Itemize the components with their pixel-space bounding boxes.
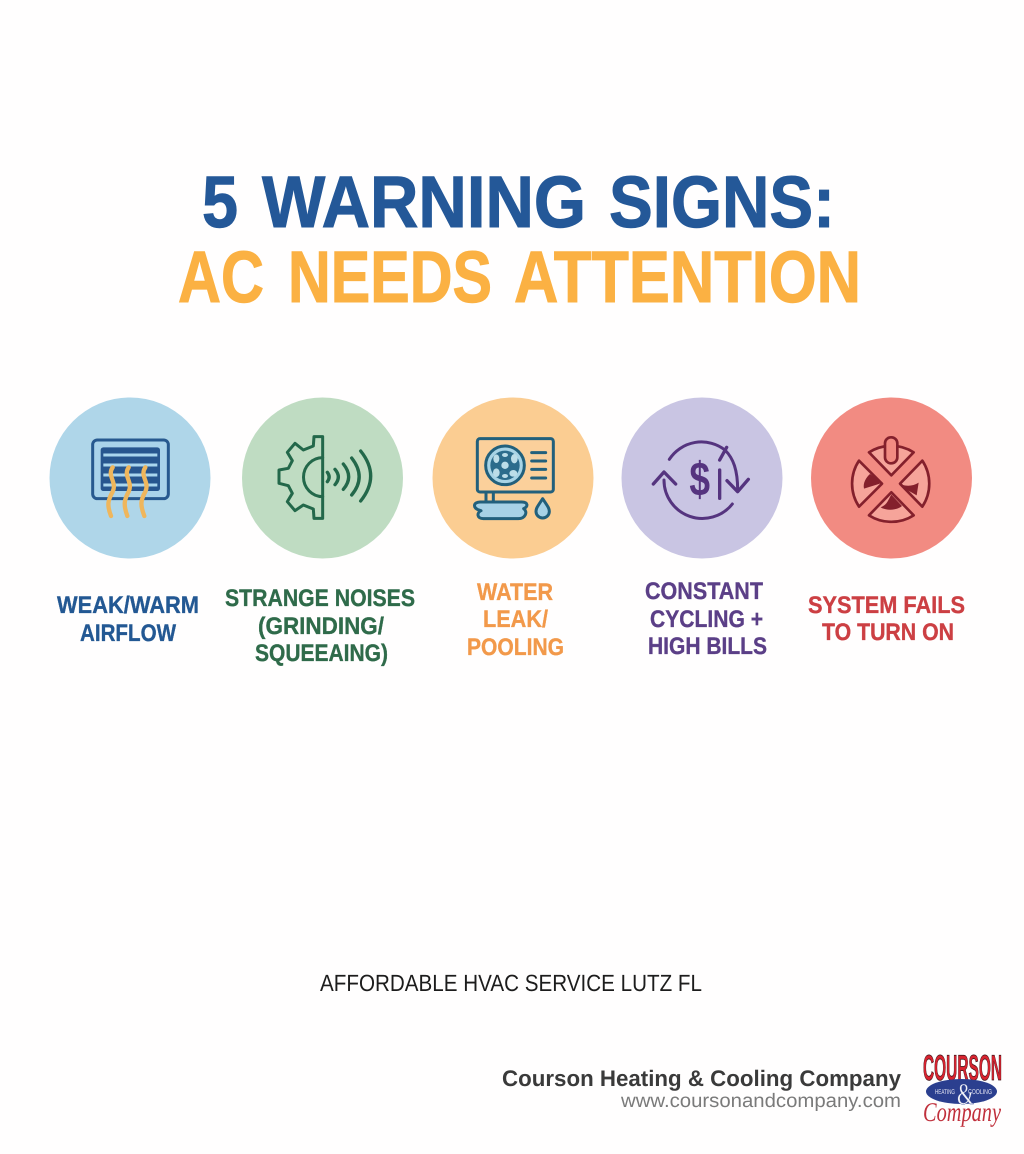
icon: cycle arrows with dollar sign xyxy=(653,442,748,518)
label: WEAK/WARM xyxy=(57,592,199,619)
label: CONSTANT xyxy=(645,578,763,605)
logo blue ellipse xyxy=(926,1079,997,1104)
title line 2: ATTENTION xyxy=(514,237,861,318)
circle background xyxy=(242,398,403,558)
label: CYCLING + xyxy=(650,606,763,633)
icon: cycle arrows with dollar sign: $ xyxy=(689,452,710,506)
title line 1: 5 xyxy=(202,162,238,243)
title line 1: SIGNS: xyxy=(609,162,835,243)
label: STRANGE NOISES xyxy=(225,585,415,612)
label: HIGH BILLS xyxy=(648,633,767,660)
label: LEAK/ xyxy=(483,606,548,633)
logo small text: HEATING xyxy=(935,1089,955,1096)
label xyxy=(225,585,415,667)
circle background xyxy=(811,398,972,558)
label: WATER xyxy=(477,579,553,606)
panel: water leak xyxy=(432,398,594,661)
label: SQUEEAING) xyxy=(255,640,388,667)
footer website: www.coursonandcompany.com xyxy=(620,1090,901,1112)
panel: system fails to turn on xyxy=(808,398,972,646)
panel: strange noises xyxy=(225,398,415,667)
panel: weak/warm airflow xyxy=(50,398,210,647)
label: POOLING xyxy=(467,634,564,661)
logo: Courson Heating & Cooling Company xyxy=(923,1047,1002,1127)
icon: AC unit with water puddle xyxy=(474,439,553,519)
logo ampersand: & xyxy=(957,1078,974,1111)
icon: air vent with heat waves xyxy=(93,440,168,516)
title line 2: AC xyxy=(178,237,264,318)
logo script word Company: Company xyxy=(923,1097,1001,1127)
label xyxy=(808,592,965,646)
label: SYSTEM FAILS xyxy=(808,592,965,619)
icon: gear with sound waves xyxy=(279,437,371,518)
footer company name: Courson Heating & Cooling Company xyxy=(502,1066,901,1091)
keyword caption: AFFORDABLE HVAC SERVICE LUTZ FL xyxy=(320,970,702,996)
title xyxy=(178,162,861,318)
icon: crossed-out power symbol xyxy=(852,437,929,522)
label: (GRINDING/ xyxy=(258,613,384,640)
label xyxy=(645,578,767,660)
title line 2: NEEDS xyxy=(288,237,492,318)
circle background xyxy=(622,398,782,558)
title line 2 xyxy=(178,237,861,318)
circle background xyxy=(432,398,594,558)
label: AIRFLOW xyxy=(80,620,176,647)
title line 1: WARNING xyxy=(262,162,586,243)
label: TO TURN ON xyxy=(822,619,954,646)
label xyxy=(467,579,564,661)
circle background xyxy=(50,398,210,558)
panel: constant cycling and high bills xyxy=(622,398,782,660)
title line 1 xyxy=(202,162,835,243)
label xyxy=(57,592,199,647)
logo small text right: COOLING xyxy=(968,1089,992,1096)
